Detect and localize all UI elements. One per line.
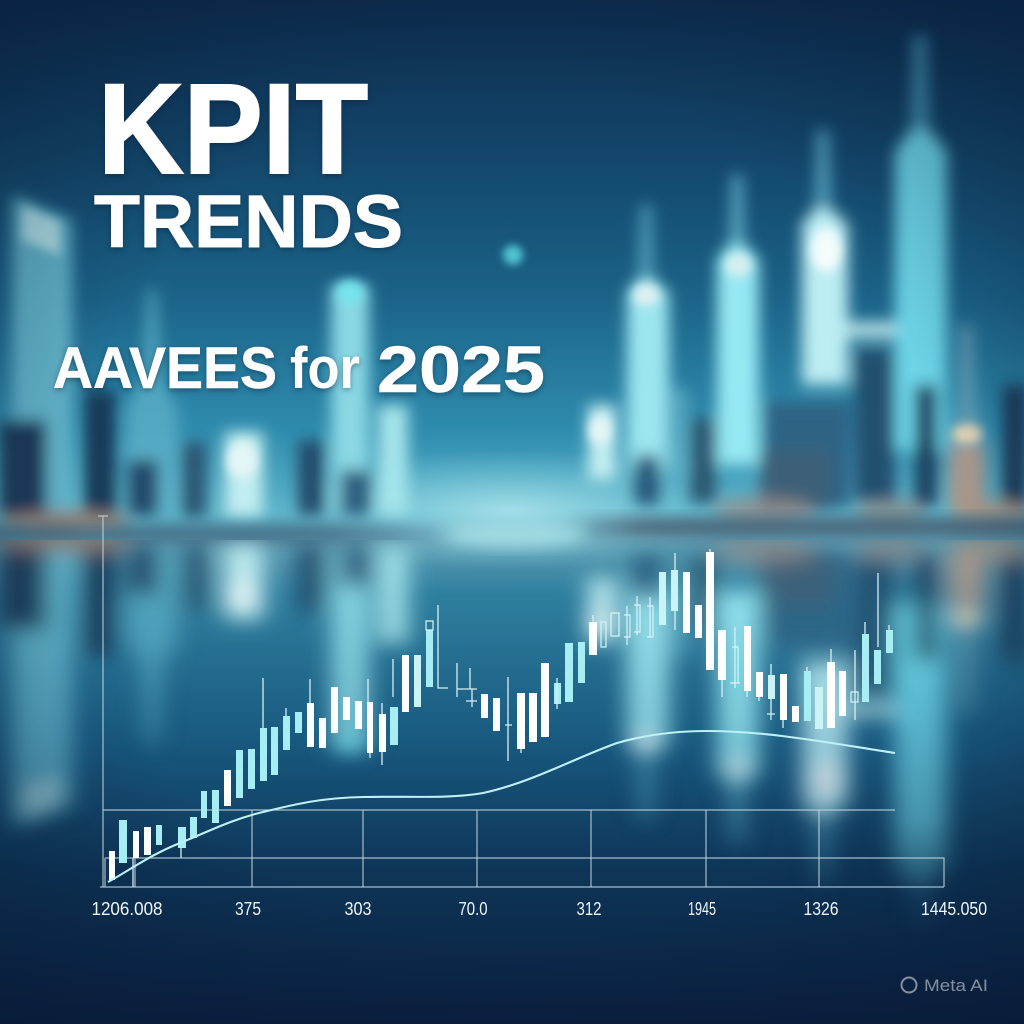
x-axis labels: 1945	[688, 899, 716, 919]
subtitle: AAVEES for 2025: AAVEES	[53, 336, 277, 401]
x-axis labels: 303	[344, 899, 372, 919]
x-axis labels: 1326	[804, 899, 838, 919]
x-axis labels: 375	[235, 899, 261, 919]
water reflection of skyline	[0, 540, 1024, 906]
title: TRENDS: TRENDS	[94, 180, 403, 263]
glowing highlights	[811, 228, 841, 272]
watermark: Meta AI	[902, 976, 988, 995]
x-axis labels: 1445.050	[921, 899, 987, 919]
candlestick series	[109, 549, 893, 887]
subtitle: AAVEES for 2025: 2025	[377, 332, 545, 406]
subtitle: AAVEES for 2025: for	[290, 336, 360, 401]
blurred city skyline	[0, 35, 1024, 534]
chart axes and grid	[98, 516, 944, 887]
x-axis labels	[92, 899, 987, 919]
title: KPIT: KPIT	[98, 58, 368, 201]
horizon band	[0, 518, 1024, 547]
x-axis labels: 1206.008	[92, 899, 162, 919]
pale left towers	[12, 195, 72, 515]
watermark: Meta AI: Meta AI	[924, 976, 988, 995]
warm lights	[950, 445, 984, 510]
faint tower spires	[638, 205, 654, 280]
x-axis labels: 312	[576, 899, 602, 919]
subtitle: AAVEES for 2025	[53, 332, 545, 406]
x-axis labels: 70.0	[458, 899, 488, 919]
dark buildings	[0, 420, 46, 515]
glowing orb	[503, 245, 523, 265]
trend line	[108, 731, 895, 882]
